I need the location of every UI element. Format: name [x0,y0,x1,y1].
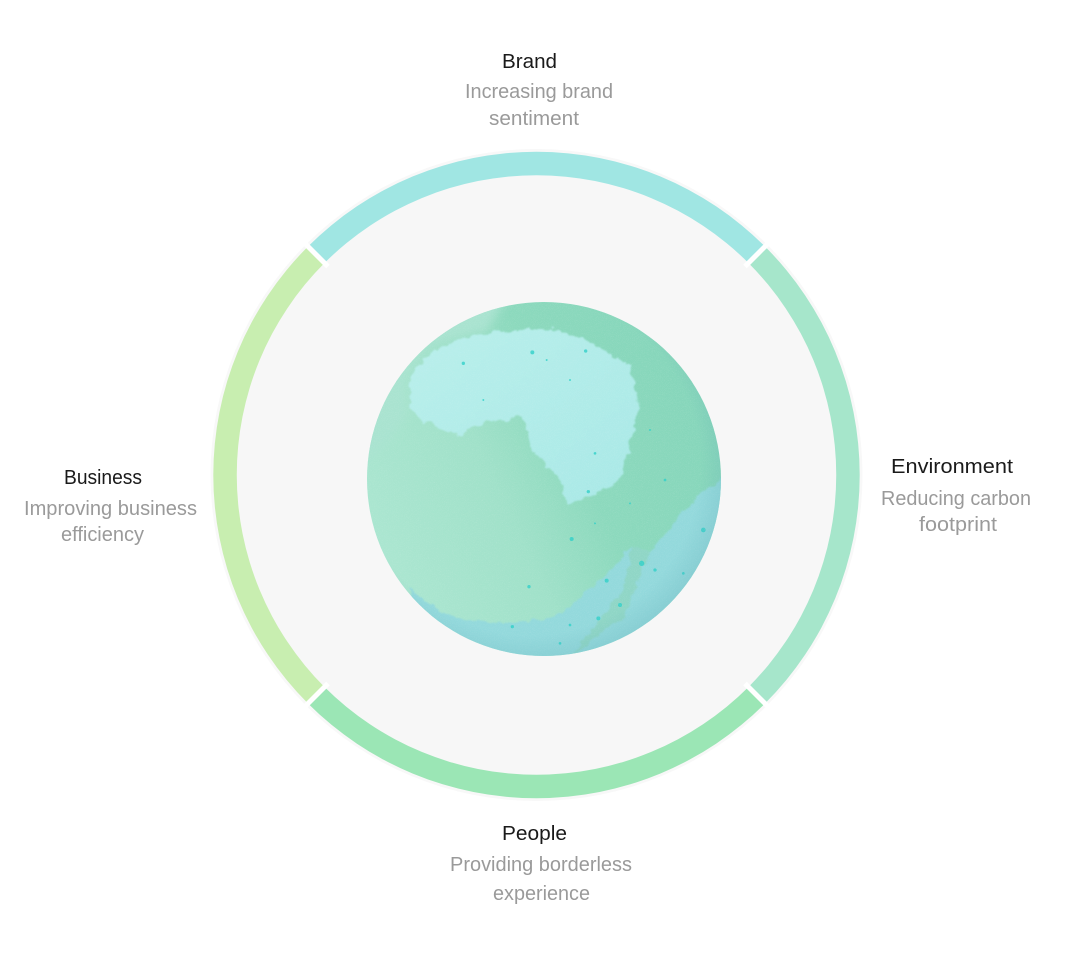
ring gaps [305,244,768,706]
business description: Improving business [24,498,197,520]
people description: experience [493,883,590,905]
environment description [881,488,1031,536]
ring segment: people [308,687,765,798]
ring segment: environment [748,246,860,704]
label: environment [881,456,1031,536]
people description: Providing borderless [450,854,632,876]
people heading: People [502,823,567,845]
label: business [24,467,197,546]
ring outer halo [210,149,862,801]
environment heading: Environment [891,456,1013,478]
sphere rim shade [478,456,721,656]
brand heading: Brand [502,51,557,73]
environment description: Reducing carbon [881,488,1031,510]
ring inner disc [236,175,836,775]
people description [450,854,632,905]
environment description: footprint [919,514,997,536]
brand description [465,81,613,130]
upper left pale rim [368,307,504,456]
ring segment: business [213,246,324,704]
sphere base [367,302,721,656]
green streak [570,547,650,657]
ring panel [210,149,862,801]
brand description: sentiment [489,108,579,130]
business description: efficiency [61,524,144,546]
business description [24,498,197,546]
lower right blue patch [410,478,721,656]
ring segment: brand [308,152,765,263]
speckle [462,349,706,645]
pale blue patch [410,328,638,505]
sphere patches [400,328,727,667]
label: people [450,823,632,905]
brand description: Increasing brand [465,81,613,103]
sphere grain [368,302,720,656]
sphere [367,302,721,656]
business heading: Business [64,467,142,489]
label: brand [465,51,613,130]
